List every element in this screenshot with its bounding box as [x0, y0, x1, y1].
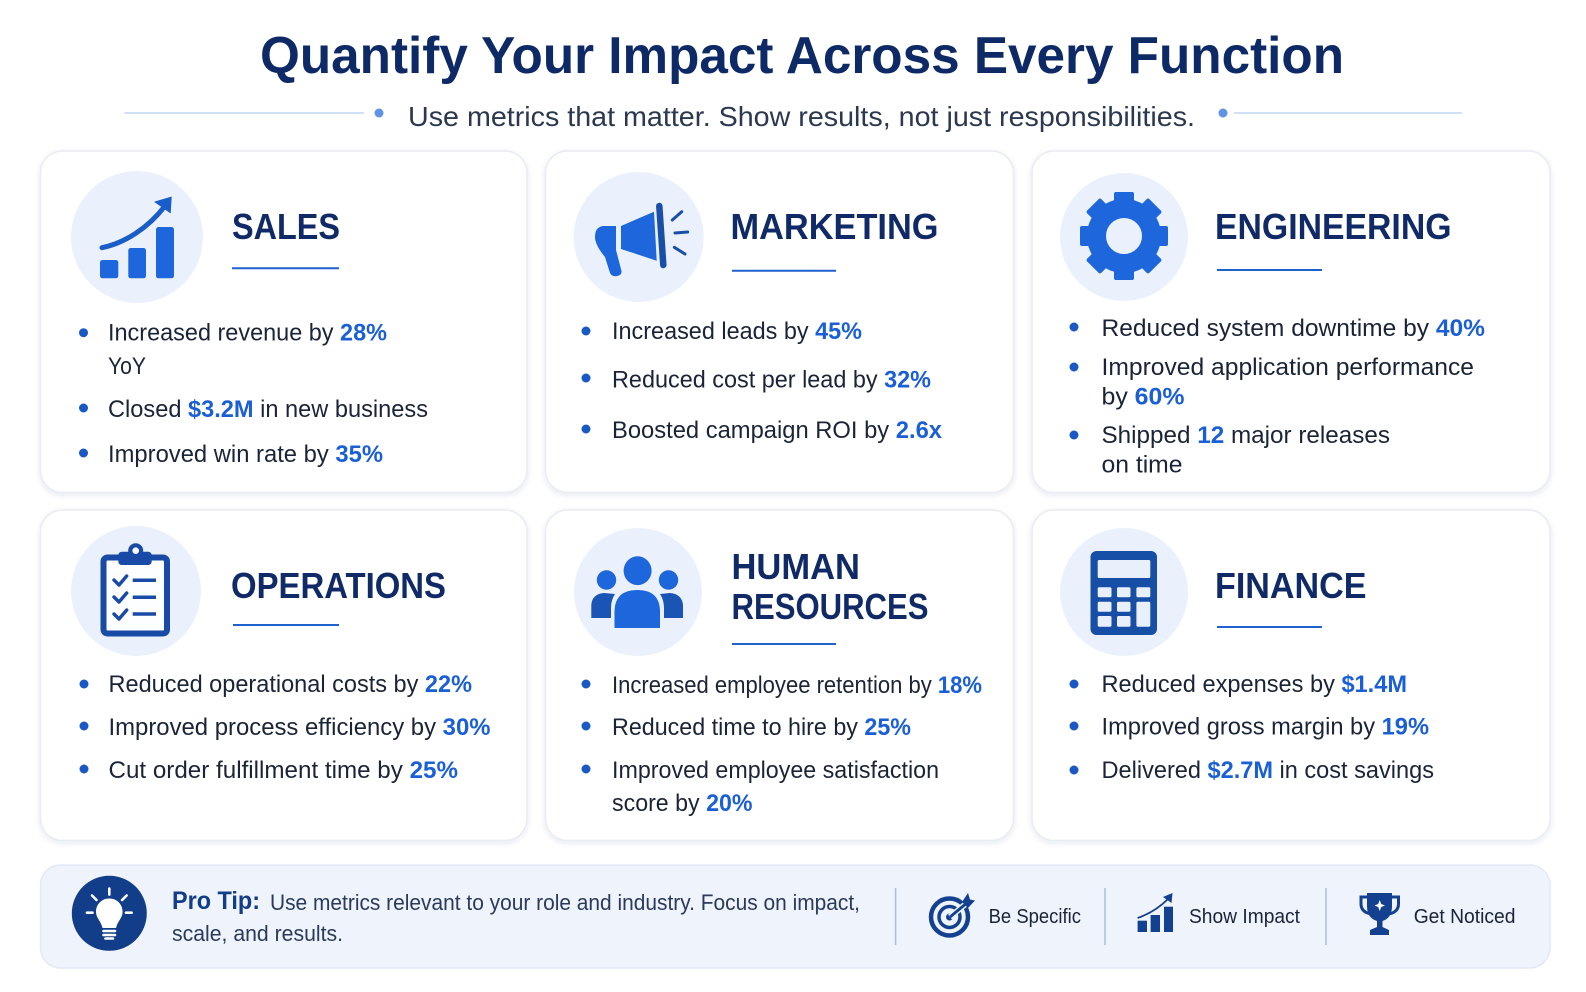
metrics: human resources: Reduced time to hire by 25% — [612, 714, 911, 741]
item: show impact — [1138, 893, 1300, 932]
metrics: sales — [79, 320, 428, 468]
heading: marketing: MARKETING — [730, 206, 938, 247]
metrics: sales: YoY — [108, 353, 146, 380]
icon: clipboard checklist — [71, 526, 201, 656]
metrics: sales: Improved win rate by 35% — [108, 441, 383, 468]
heading: operations: OPERATIONS — [231, 565, 446, 606]
metrics: engineering: Reduced system downtime by 40% — [1102, 315, 1485, 342]
item: get noticed — [1361, 893, 1516, 935]
metrics: marketing: Boosted campaign ROI by 2.6x — [612, 417, 943, 444]
metrics: human resources: score by 20% — [612, 790, 752, 817]
metrics: finance: Delivered $2.7M in cost savings — [1102, 757, 1434, 784]
metrics: marketing: Increased leads by 45% — [612, 318, 862, 345]
metrics: operations: Cut order fulfillment time by 25% — [108, 757, 458, 784]
subtitle — [124, 101, 1462, 132]
metrics: marketing — [582, 318, 943, 444]
subtitle: Use metrics that matter. Show results, not just responsibilities. — [408, 101, 1195, 132]
text: pro tip: Use metrics relevant to your role and industry. Focus on impact, — [270, 890, 860, 915]
icon: calculator — [1060, 528, 1188, 656]
icon: gear — [1060, 173, 1188, 301]
heading: human resources: RESOURCES — [732, 586, 928, 627]
icon: target — [931, 893, 975, 936]
panel: operations — [40, 510, 527, 840]
metrics: finance — [1070, 671, 1434, 784]
heading: human resources: HUMAN — [732, 546, 860, 587]
metrics: marketing: Reduced cost per lead by 32% — [612, 366, 931, 394]
text: pro tip: Pro Tip: — [172, 887, 260, 915]
metrics: human resources: Increased employee retention by 18% — [612, 672, 982, 699]
icon: rising bar chart — [71, 171, 203, 303]
heading: sales: SALES — [232, 206, 340, 247]
panel: marketing — [546, 151, 1014, 492]
heading: engineering: ENGINEERING — [1215, 206, 1452, 247]
item: get noticed: Get Noticed — [1414, 906, 1516, 928]
metrics: operations: Reduced operational costs by 22% — [108, 671, 472, 698]
panel: pro tip bar — [40, 865, 1550, 968]
metrics: engineering — [1070, 315, 1485, 478]
title: Quantify Your Impact Across Every Function — [260, 27, 1344, 85]
panel: finance — [1032, 510, 1550, 840]
metrics: sales: Increased revenue by 28% — [108, 320, 387, 346]
icon: light bulb — [72, 876, 147, 951]
metrics: human resources: Improved employee satisfaction — [612, 757, 939, 784]
metrics: finance: Reduced expenses by $1.4M — [1102, 671, 1407, 698]
icon: people group — [574, 528, 702, 656]
metrics: engineering: Improved application performance — [1102, 354, 1474, 381]
metrics: sales: Closed $3.2M in new business — [108, 396, 428, 423]
item: be specific — [931, 893, 1081, 936]
metrics: engineering: Shipped 12 major releases — [1102, 422, 1390, 449]
icon: trophy — [1361, 893, 1398, 935]
metrics: operations — [80, 671, 490, 784]
icon: megaphone — [574, 172, 704, 302]
item: show impact: Show Impact — [1189, 906, 1300, 928]
heading: finance: FINANCE — [1215, 565, 1366, 606]
panel: engineering — [1032, 151, 1550, 492]
text: pro tip — [172, 887, 860, 946]
metrics: human resources — [582, 672, 982, 817]
item: be specific: Be Specific — [989, 906, 1081, 928]
panel: human resources — [546, 510, 1014, 840]
icon: bars with arrow — [1138, 893, 1173, 932]
metrics: engineering: by 60% — [1102, 384, 1184, 411]
metrics: engineering: on time — [1102, 452, 1182, 478]
heading: human resources — [732, 546, 928, 627]
text: pro tip: scale, and results. — [172, 921, 343, 946]
panel: sales — [40, 151, 527, 492]
metrics: finance: Improved gross margin by 19% — [1102, 714, 1429, 740]
metrics: operations: Improved process efficiency by 30% — [108, 714, 490, 741]
